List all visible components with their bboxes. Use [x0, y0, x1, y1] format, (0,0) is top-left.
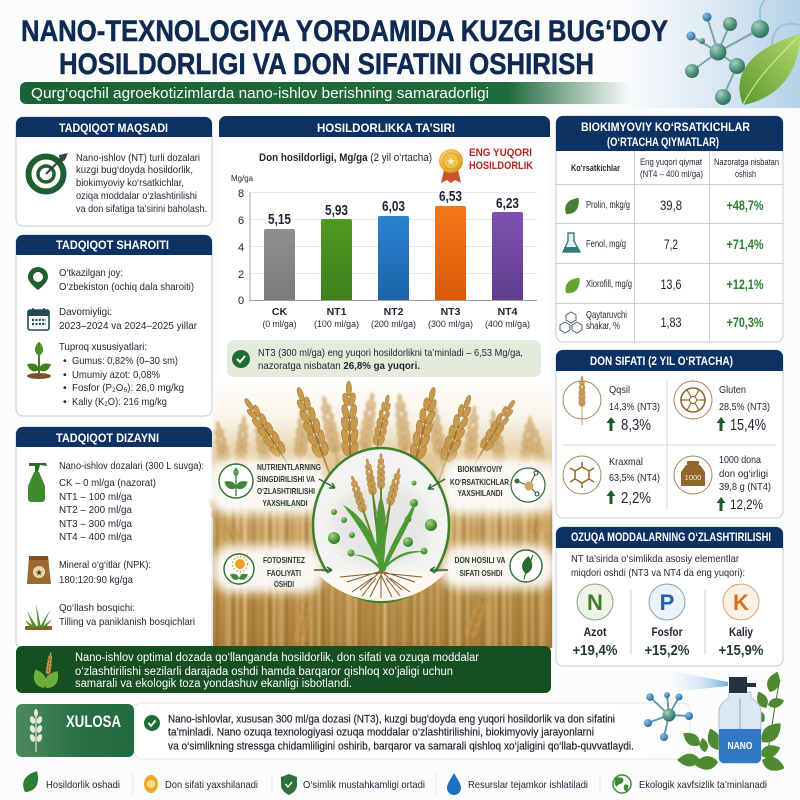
central circle: plant and nanoparticles	[313, 448, 449, 602]
table header: Eng yuqori qiymat	[640, 157, 702, 168]
item: 1000 grain weight: 39,8 g (NT4)	[719, 481, 771, 493]
bar: NT1: NT1	[327, 306, 347, 318]
nutrient: azot	[572, 584, 618, 659]
molecule	[644, 692, 693, 741]
title	[21, 15, 668, 81]
table header: Ko‘rsatkichlar	[571, 163, 620, 174]
panel: biokimyoviy ko'rsatkichlar	[556, 116, 783, 342]
text: summary: va o‘simlikning stressga chidamliligini oshirib, barqaror va samarali qishloq xo‘jaligini qo‘llab-quvvatlaydi.	[168, 740, 634, 752]
bar: CK: (0 ml/ga)	[262, 319, 296, 329]
bar: CK: 5,15	[268, 211, 291, 228]
panel: hosildorlikka ta'siri	[219, 116, 550, 378]
text: mineral fertilizers: 180:120:90 kg/ga	[59, 574, 133, 586]
nutrient: fosfor: P	[660, 590, 674, 615]
bottle	[719, 677, 761, 763]
panel: ozuqa moddalar	[556, 527, 783, 666]
item: gluten: Gluten	[719, 384, 746, 396]
text: summary: ta’minladi. Nano ozuqa texnologiyasi ozuqa moddalar o‘zlashtirilishini, biokimyoviy jarayonlarni	[168, 726, 594, 738]
row: xlorofill: Xlorofill, mg/g	[586, 278, 632, 290]
benefit: ekologik: Ekologik xavfsizlik ta’minlanadi	[639, 779, 767, 791]
label: grain yield: SIFATI OSHDI	[460, 568, 502, 578]
item: starch: 63,5% (NT4)	[609, 472, 660, 484]
nutrient: fosfor: +15,2%	[644, 643, 690, 659]
panel: tadqiqot dizayni	[16, 427, 212, 649]
section: xulosa	[16, 703, 690, 759]
text: soil properties: Tuproq xususiyatlari:	[59, 341, 147, 353]
icon: medal: ★	[446, 156, 456, 168]
text: application stage: Qo‘llash bosqichi:	[59, 602, 135, 614]
item: gluten: 15,4%	[730, 417, 766, 434]
label: photosynthesis: OSHDI	[274, 579, 294, 589]
benefit: don sifati	[144, 775, 258, 793]
row: prolin: 39,8	[660, 197, 682, 213]
item: starch: Kraxmal	[609, 456, 643, 468]
nutrient: fosfor: Fosfor	[652, 625, 683, 639]
label: biochemical indicators: BIOKIMYOVIY	[458, 464, 503, 474]
label: grain yield	[454, 555, 506, 578]
callout: key finding: NT3 (300 ml/ga) eng yuqori hosildorlikni ta’minladi – 6,53 Mg/ga,	[258, 347, 523, 359]
text: objective: kuzgi bug‘doyda hosildorlik,	[76, 164, 193, 176]
bar chart: 8	[238, 188, 244, 200]
wheat field illustration	[202, 378, 558, 681]
text: doses: NT1 – 100 ml/ga	[59, 491, 132, 503]
row: shakar: Qaytaruvchi	[586, 309, 627, 321]
bar chart: 0	[238, 295, 244, 307]
bar chart: 4	[238, 242, 244, 254]
text: duration: 2023–2024 va 2024–2025 yillar	[59, 320, 197, 332]
row: shakar: +70,3%	[726, 314, 764, 330]
text: soil properties: Fosfor (P₂O₅): 26,0 mg/kg	[72, 382, 184, 394]
nutrient: azot: Azot	[584, 625, 606, 639]
roots	[340, 571, 422, 598]
item: 1000 grain weight: 12,2%	[730, 496, 763, 512]
text: mineral fertilizers	[59, 559, 151, 586]
item: starch: 2,2%	[621, 490, 651, 507]
text: doses: NT2 – 200 ml/ga	[59, 504, 132, 516]
text: application stage: Tilling va paniklanish bosqichlari	[59, 616, 195, 628]
text: objective: biokimyoviy ko‘rsatkichlar,	[76, 177, 184, 189]
bar: NT3	[428, 188, 473, 329]
row: fenol: +71,4%	[726, 236, 764, 252]
icon: spray bottle	[28, 463, 47, 502]
bar: NT4: NT4	[498, 306, 518, 318]
nanoparticles	[328, 480, 437, 556]
benefit: ekologik	[613, 775, 767, 793]
bar: NT2: 6,03	[382, 198, 405, 215]
bar: NT3: 6,53	[439, 188, 462, 205]
benefit: don sifati: Don sifati yaxshilanadi	[165, 779, 258, 791]
nutrient: kaliy: K	[733, 590, 749, 615]
panel: tadqiqot maqsadi: TADQIQOT MAQSADI	[59, 121, 168, 135]
text: application stage	[59, 602, 195, 628]
text: doses: NT4 – 400 ml/ga	[59, 531, 132, 543]
text: intro: NT ta’sirida o‘simlikda asosiy elementlar	[571, 553, 739, 565]
icon: wheat	[29, 709, 43, 752]
arrow: grain yield	[430, 567, 448, 573]
bar: NT2: NT2	[384, 306, 404, 318]
table header: oshish	[735, 169, 756, 180]
bar: NT3: NT3	[441, 306, 461, 318]
nutrient: azot: +19,4%	[572, 643, 618, 659]
text: soil properties	[59, 341, 184, 408]
callout: key finding	[227, 340, 541, 377]
row: prolin	[561, 194, 764, 218]
text: soil properties: Kaliy (K₂O): 216 mg/kg	[72, 396, 167, 408]
item: 1000 grain weight: don og‘irligi	[719, 468, 768, 480]
bottle: NANO	[728, 740, 752, 752]
item: protein: 14,3% (NT3)	[609, 401, 660, 413]
nutrient: fosfor	[644, 584, 690, 659]
text: location	[59, 267, 194, 293]
row: fenol	[563, 233, 764, 252]
benefit: resurslar	[447, 773, 588, 795]
icon: wheat and leaves	[30, 652, 62, 691]
panel: tadqiqot maqsadi	[16, 117, 212, 226]
banner: conclusion statement	[16, 646, 551, 693]
section: xulosa: XULOSA	[66, 712, 121, 731]
bar: NT4: (400 ml/ga)	[485, 319, 530, 329]
label: biochemical indicators	[450, 464, 509, 498]
text: soil properties: •	[63, 355, 67, 367]
text: objective: oziqa moddalar o‘zlashtirilishi	[76, 190, 197, 202]
text: doses: CK – 0 ml/ga (nazorat)	[59, 477, 156, 489]
bar: NT1: (100 ml/ga)	[314, 319, 359, 329]
item: gluten: 28,5% (NT3)	[719, 401, 770, 413]
benefit: mustahkamlik: O‘simlik mustahkamligi ortadi	[303, 779, 425, 791]
text: doses: NT3 – 300 ml/ga	[59, 518, 132, 530]
nutrient: kaliy: +15,9%	[718, 643, 764, 659]
chart title: Don hosildorligi, Mg/ga (2 yil o‘rtacha)	[259, 152, 432, 164]
bar: NT2: (200 ml/ga)	[371, 319, 416, 329]
table header	[571, 157, 779, 180]
bar: NT2	[371, 198, 416, 329]
text: duration	[59, 306, 197, 332]
text: soil properties: •	[63, 396, 67, 408]
icon: plant nutrients	[219, 464, 253, 498]
item: gluten	[674, 381, 770, 434]
foreground wheat ears	[238, 381, 521, 504]
label: nutrient uptake: SINGDIRILISHI VA	[257, 474, 315, 484]
table header: Nazoratga nisbatan	[714, 157, 779, 168]
icon: check	[144, 715, 160, 731]
icon: location pin	[28, 267, 48, 290]
panel: tadqiqot sharoiti	[16, 235, 212, 416]
row: shakar: shakar, %	[586, 320, 620, 332]
panel: don sifati: DON SIFATI (2 YIL O‘RTACHA)	[590, 354, 733, 368]
row: prolin: +48,7%	[726, 197, 764, 213]
text: objective	[76, 152, 207, 215]
item: protein	[563, 376, 660, 434]
arrow: photosynthesis	[314, 567, 332, 573]
panel: don sifati	[556, 350, 783, 518]
row: prolin: Prolin, mkg/g	[586, 199, 630, 211]
item: starch	[563, 456, 660, 507]
bar: NT1	[314, 202, 359, 329]
text: doses	[59, 460, 204, 543]
item: 1000 grain weight	[674, 454, 771, 512]
text: soil properties: •	[63, 382, 67, 394]
panel: hosildorlikka ta'siri: HOSILDORLIKKA TA’SIRI	[317, 121, 455, 135]
row: shakar	[560, 309, 764, 333]
text: duration: Davomiyligi:	[59, 306, 112, 318]
item: 1000 grain weight: 1000	[685, 473, 701, 482]
wheat plant	[340, 453, 425, 571]
panel: biokimyoviy ko'rsatkichlar: BIOKIMYOVIY KO‘RSATKICHLAR	[581, 120, 750, 134]
bar: CK	[262, 211, 296, 329]
icon: medal	[439, 149, 463, 183]
benefit: mustahkamlik	[281, 774, 425, 795]
row: fenol: 7,2	[664, 236, 678, 252]
leaves	[677, 670, 787, 775]
row: fenol: Fenol, mg/g	[586, 238, 626, 250]
row: xlorofill: +12,1%	[726, 276, 764, 292]
arrow: nutrient uptake	[319, 479, 335, 488]
row: xlorofill: 13,6	[660, 276, 682, 292]
text: soil properties: Gumus: 0,82% (0–30 sm)	[72, 355, 178, 367]
background wheat ears	[202, 391, 556, 681]
text: soil properties: Umumiy azot: 0,08%	[72, 369, 160, 381]
text: intro: miqdori oshdi (NT3 va NT4 da eng yuqori):	[571, 567, 745, 579]
text: intro	[571, 553, 745, 579]
label: biochemical indicators: YAXSHILANDI	[458, 488, 502, 498]
icon: grass	[25, 604, 52, 630]
text: mineral fertilizers: Mineral o‘g‘itlar (NPK):	[59, 559, 151, 571]
bar: CK: CK	[272, 306, 287, 318]
arrow: biochemical indicators	[428, 479, 445, 489]
icon: target	[28, 153, 68, 192]
label: biochemical indicators: KO‘RSATKICHLAR	[450, 477, 509, 487]
label: nutrient uptake: NUTRIENTLARNING	[257, 462, 321, 472]
bar: NT3: (300 ml/ga)	[428, 319, 473, 329]
bar: NT4	[485, 195, 530, 329]
label: nutrient uptake: O‘ZLASHTIRILISHI	[257, 486, 315, 496]
item: protein: 8,3%	[621, 417, 651, 434]
bar: NT1: 5,93	[325, 202, 348, 219]
icon: calendar	[28, 308, 49, 330]
benefit: hosildorlik	[19, 768, 120, 795]
text: location: O‘tkazilgan joy:	[59, 267, 123, 279]
label: photosynthesis	[263, 555, 305, 589]
icon: fertilizer bag	[27, 556, 51, 584]
item: protein: Qqsil	[609, 384, 630, 396]
table grid	[556, 151, 783, 342]
banner: conclusion statement: Nano-ishlov optimal dozada qo‘llanganda hosildorlik, don sifati va ozuqa moddalar	[75, 652, 479, 664]
nutrient: kaliy: Kaliy	[729, 625, 753, 639]
bar: NT4: 6,23	[496, 195, 519, 212]
text: location: O‘zbekiston (ochiq dala sharoiti)	[59, 281, 194, 293]
callout: key finding: nazoratga nisbatan 26,8% ga yuqori.	[258, 360, 420, 372]
text: objective: va don sifatiga ta’sirini baholash.	[76, 203, 207, 215]
icon: fertilizer bag: ★	[35, 568, 43, 578]
row: shakar: 1,83	[660, 314, 682, 330]
white label glow bands	[208, 458, 558, 593]
title: NANO-TEXNOLOGIYA YORDAMIDA KUZGI BUG‘DOY	[21, 15, 668, 48]
panel: biokimyoviy ko'rsatkichlar: (O‘RTACHA QIYMATLAR)	[607, 135, 719, 149]
bar chart: Mg/ga	[231, 174, 254, 183]
banner: conclusion statement: o‘zlashtirilishi sezilarli darajada oshdi hamda barqaror qishloq xo‘jaligi uchun	[75, 666, 453, 678]
item: 1000 grain weight: 1000 dona	[719, 454, 761, 466]
label: photosynthesis: FOTOSINTEZ	[263, 555, 305, 565]
bar chart: 6	[238, 215, 244, 227]
text: objective: Nano-ishlov (NT) turli dozalari	[76, 152, 200, 164]
bar chart: 2	[238, 269, 244, 281]
text: summary: Nano-ishlovlar, xususan 300 ml/ga dozasi (NT3), kuzgi bug‘doyda eng yuqori hosildorlik va don sifatini	[168, 714, 615, 726]
header decoration: molecule and leaf	[620, 0, 800, 108]
benefit: hosildorlik: Hosildorlik oshadi	[46, 779, 120, 791]
callout: highest yield	[469, 147, 533, 172]
subtitle bar	[20, 82, 630, 104]
callout: highest yield: HOSILDORLIK	[469, 160, 533, 172]
icon: photosynthesis	[224, 554, 254, 584]
banner: conclusion statement: samarali va ekologik toza yondashuv ekanligi isbotlandi.	[75, 678, 352, 690]
nutrient: kaliy	[718, 584, 764, 659]
title: HOSILDORLIGI VA DON SIFATINI OSHIRISH	[59, 48, 594, 81]
text: summary	[168, 714, 634, 752]
icon: grain yield	[510, 550, 542, 582]
panel: tadqiqot sharoiti: TADQIQOT SHAROITI	[56, 238, 169, 252]
icon: sprout	[25, 342, 53, 379]
illustration: nano spray bottle	[644, 670, 787, 775]
text: soil properties: •	[63, 369, 67, 381]
row: xlorofill	[562, 274, 764, 297]
subtitle bar: Qurg‘oqchil agroekotizimlarda nano-ishlov berishning samaradorligi	[31, 85, 489, 102]
label: nutrient uptake	[257, 462, 321, 508]
icon: molecule	[511, 468, 545, 502]
nutrient: azot: N	[587, 590, 603, 615]
panel: tadqiqot dizayni: TADQIQOT DIZAYNI	[56, 431, 159, 445]
benefit: resurslar: Resurslar tejamkor ishlatiladi	[468, 779, 588, 791]
label: grain yield: DON HOSILI VA	[454, 555, 506, 565]
table header: (NT4 – 400 ml/ga)	[640, 169, 703, 180]
label: nutrient uptake: YAXSHILANDI	[262, 498, 308, 508]
label: photosynthesis: FAOLIYATI	[267, 568, 301, 578]
callout: highest yield: ENG YUQORI	[469, 147, 532, 159]
text: doses: Nano-ishlov dozalari (300 L suvga):	[59, 460, 204, 472]
bar chart	[231, 174, 537, 329]
